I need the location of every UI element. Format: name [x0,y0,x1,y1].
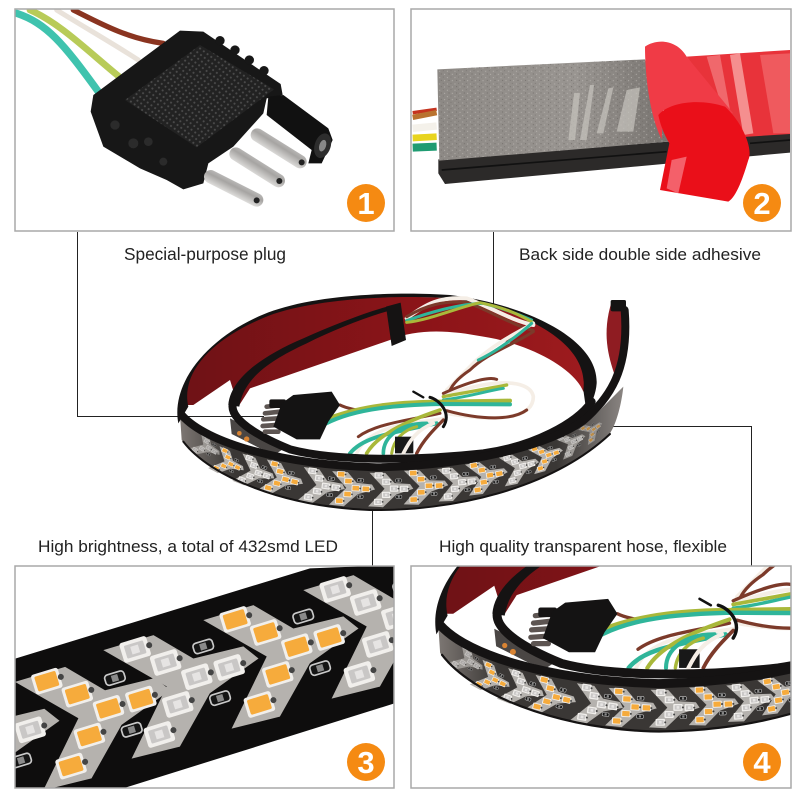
peeled red film [645,42,750,202]
badge 2 [743,184,781,222]
panel 3: LED close-up [14,565,395,789]
inner black rim, rear [228,305,395,407]
black mounting clip [386,303,406,346]
black channel side [438,134,790,184]
black strip base [13,565,397,790]
caption: back side adhesive: Back side double side adhesive [519,245,761,264]
caption: transparent hose: High quality transparent hose, flexible [439,537,727,556]
tail of strip with red backing [607,300,626,376]
central photo: coiled LED strip [177,294,626,511]
panel 2: adhesive backing photo [411,9,791,231]
wires entering the plug [17,10,163,92]
red liner behind [687,50,790,138]
chevron LED groups [188,416,608,508]
badge 1 [347,184,385,222]
leader lines connecting the strip to the detail panels [78,232,752,566]
panel 4: flexible hose close-up [410,565,792,789]
plug metal pins [211,135,305,203]
badge 3 [347,743,385,781]
chevron LED modules [0,546,476,800]
wires at strip end [413,109,437,148]
caption: high brightness: High brightness, a total of 432smd LED [38,537,338,556]
red adhesive back of strip [186,297,587,407]
badge 1: 1 [357,186,375,221]
LED band body [180,387,623,511]
plug socket [267,95,334,163]
badge 4: 4 [753,745,771,780]
badge 2: 2 [753,186,771,221]
outer black rim, rear [177,294,597,423]
badge 3: 3 [357,745,375,780]
grey foam adhesive [437,59,668,161]
wire bundle [325,298,533,453]
badge 4 [743,743,781,781]
caption: special-purpose plug: Special-purpose plug [124,244,286,264]
panel 1: special-purpose plug photo [15,9,394,231]
black rims, front [182,310,625,510]
wiring plug on the strip [263,392,340,439]
plug body [91,31,283,189]
inner LED band section [230,418,287,453]
